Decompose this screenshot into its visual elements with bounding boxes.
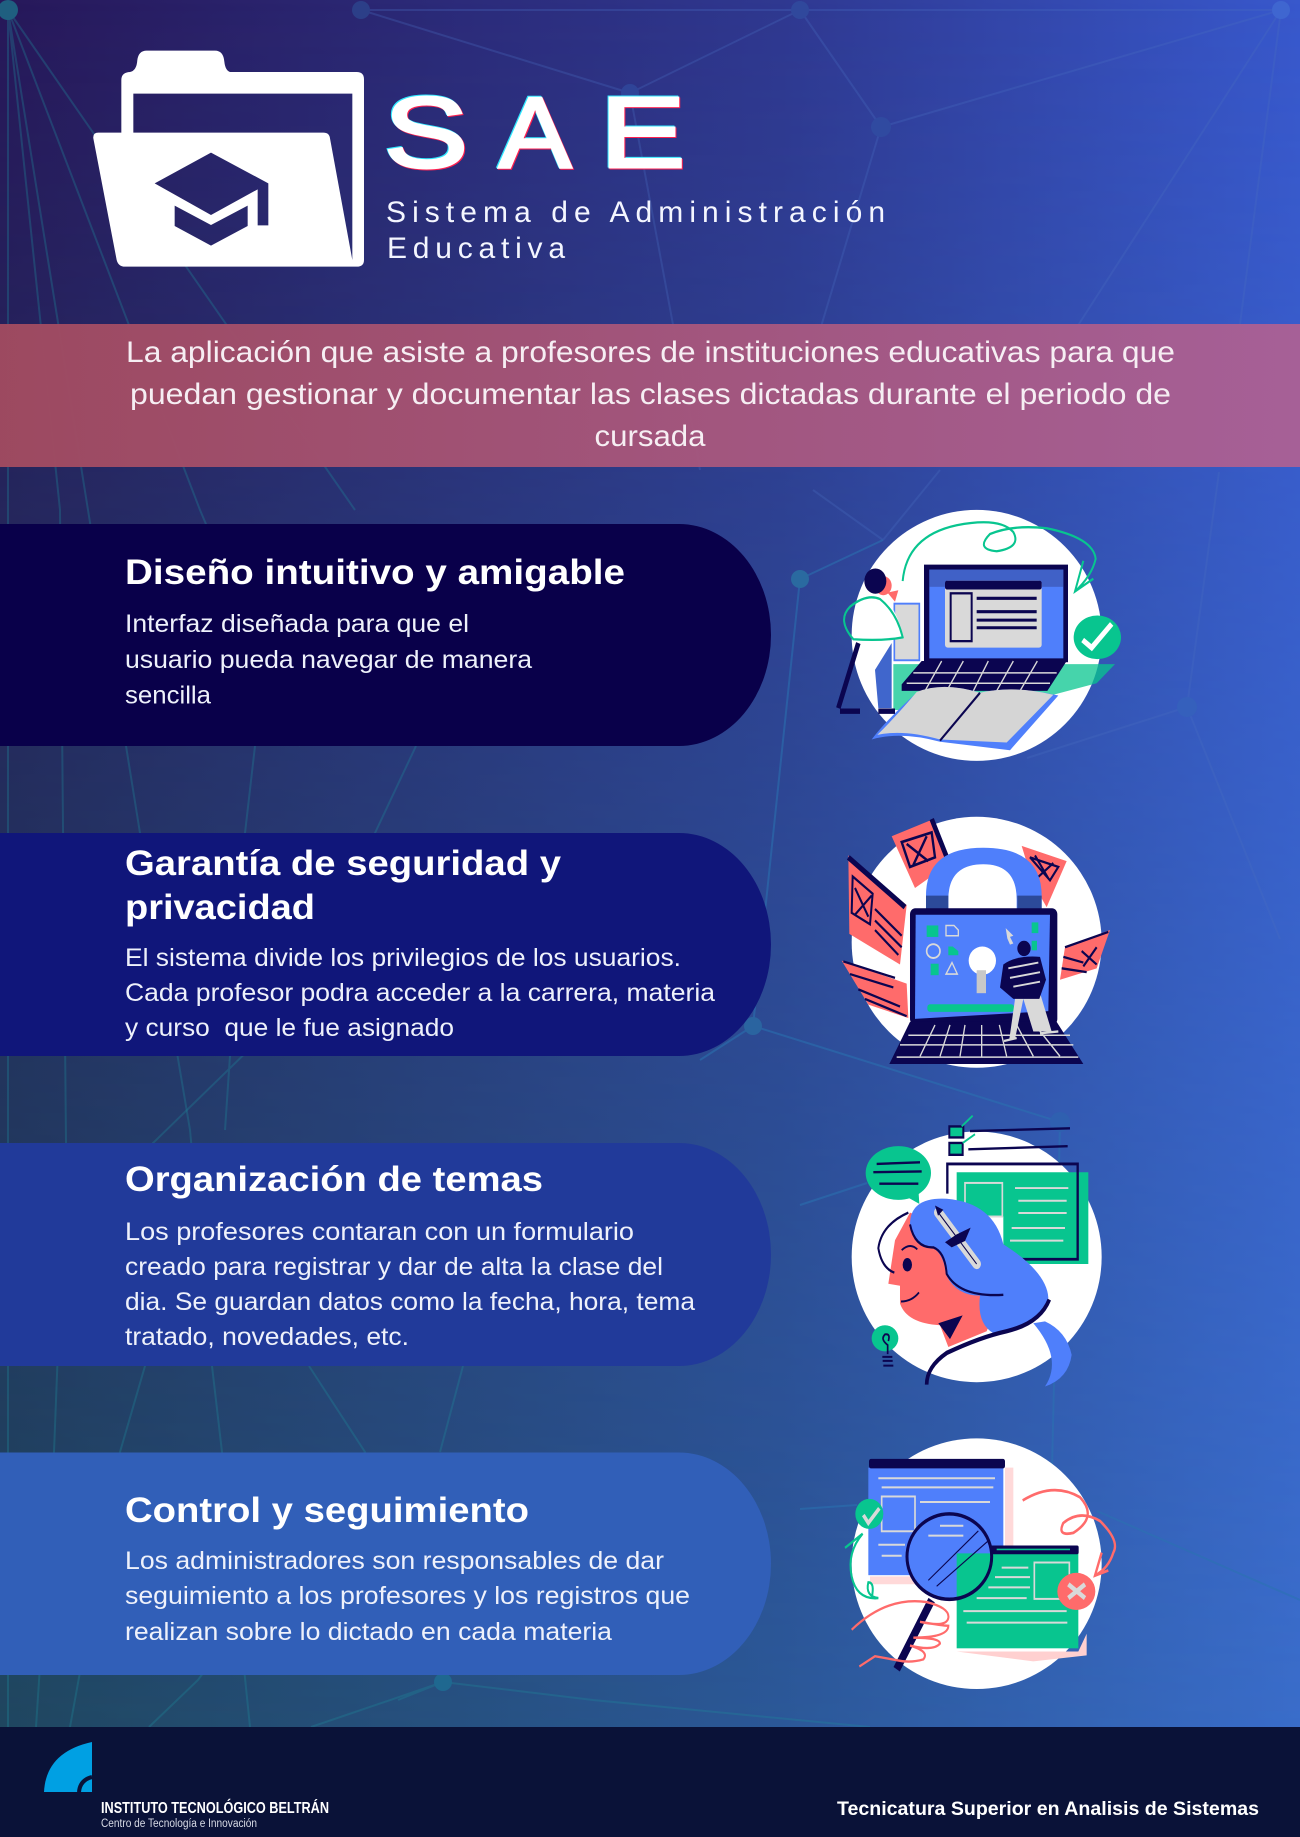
icon: laptop, person and book [838, 510, 1121, 761]
panel: control y seguimiento [0, 1452, 771, 1675]
text block [125, 944, 715, 1042]
logo: folder with graduation cap [93, 51, 364, 267]
banner: description: cursada [594, 420, 706, 453]
text block: El sistema divide los privilegios de los usuarios. [125, 944, 681, 972]
panel: diseño intuitivo [0, 524, 771, 746]
text block: seguimiento a los profesores y los registros que [125, 1582, 690, 1610]
text block: Los profesores contaran con un formulario [125, 1218, 634, 1246]
text block: creado para registrar y dar de alta la clase del [125, 1253, 663, 1281]
logo subtitle: Sistema de Administración [386, 196, 885, 229]
text block: usuario pueda navegar de manera [125, 646, 532, 674]
text block [125, 1547, 690, 1646]
logo wordmark: SAE: S [384, 77, 468, 189]
banner: description: La aplicación que asiste a profesores de instituciones educativas para que [126, 336, 1175, 369]
heading: privacidad [125, 888, 315, 927]
footer bar [0, 1727, 1300, 1837]
logo subtitle: Educativa [387, 232, 565, 265]
career name: Tecnicatura Superior en Analisis de Sistemas [837, 1799, 1259, 1820]
panel: organización de temas [0, 1143, 771, 1366]
text block [125, 1218, 695, 1351]
heading [125, 844, 562, 927]
logo subtitle [386, 196, 885, 265]
banner: description: puedan gestionar y documentar las clases dictadas durante el periodo de [130, 378, 1171, 411]
icon: padlock laptop [842, 817, 1110, 1068]
institute name: Centro de Tecnología e Innovación [101, 1818, 257, 1830]
institute name [101, 1798, 329, 1830]
text block: Los administradores son responsables de dar [125, 1547, 664, 1575]
icon: institute logo [44, 1742, 92, 1792]
icon: magnifier over windows [845, 1438, 1115, 1689]
text block: Cada profesor podra acceder a la carrera, materia [125, 979, 715, 1007]
text block: dia. Se guardan datos como la fecha, hora, tema [125, 1288, 695, 1316]
icon: woman with pencil in hair [852, 1116, 1102, 1387]
heading: Organización de temas [125, 1160, 543, 1199]
heading: Garantía de seguridad y [125, 844, 562, 883]
text block [125, 610, 532, 710]
institute name: INSTITUTO TECNOLÓGICO BELTRÁN [101, 1798, 329, 1817]
text block: tratado, novedades, etc. [125, 1323, 409, 1351]
heading: Diseño intuitivo y amigable [125, 553, 625, 592]
text block: realizan sobre lo dictado en cada materia [125, 1618, 612, 1646]
logo wordmark: SAE: E [600, 77, 685, 189]
banner: description [0, 324, 1300, 467]
logo wordmark: SAE [384, 77, 685, 189]
text block: sencilla [125, 682, 211, 710]
panel: seguridad y privacidad [0, 833, 771, 1056]
logo wordmark: SAE: A [499, 78, 572, 189]
text block: y curso que le fue asignado [125, 1014, 454, 1042]
heading: Control y seguimiento [125, 1491, 529, 1530]
text block: Interfaz diseñada para que el [125, 610, 469, 638]
